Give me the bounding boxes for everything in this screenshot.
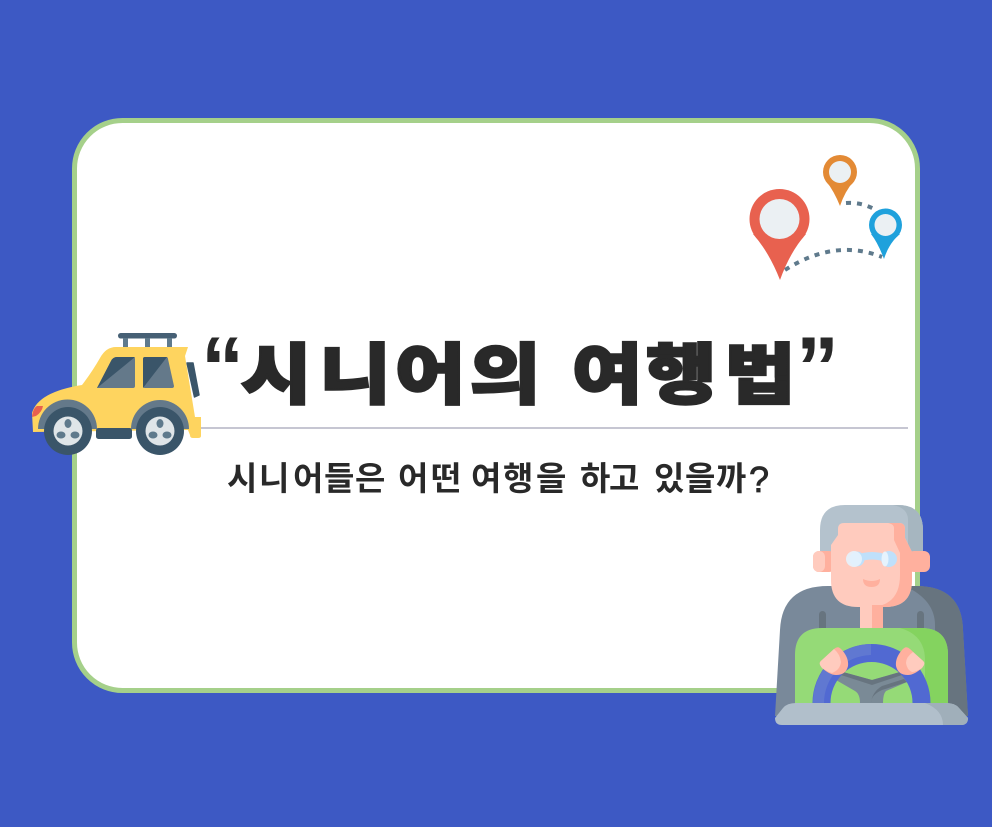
icon: map pins with route (750, 155, 902, 280)
title (201, 320, 839, 416)
title: 시니어의 여행법 (241, 339, 795, 413)
icon: senior driver (775, 505, 968, 725)
subtitle: 시니어들은 어떤 여행을 하고 있을까 (227, 460, 746, 497)
title: “ (201, 320, 244, 416)
divider line (198, 427, 908, 429)
title: ” (796, 320, 839, 416)
subtitle: ? (749, 459, 769, 500)
icon: yellow car (32, 333, 201, 455)
panel: white card (74, 120, 918, 690)
